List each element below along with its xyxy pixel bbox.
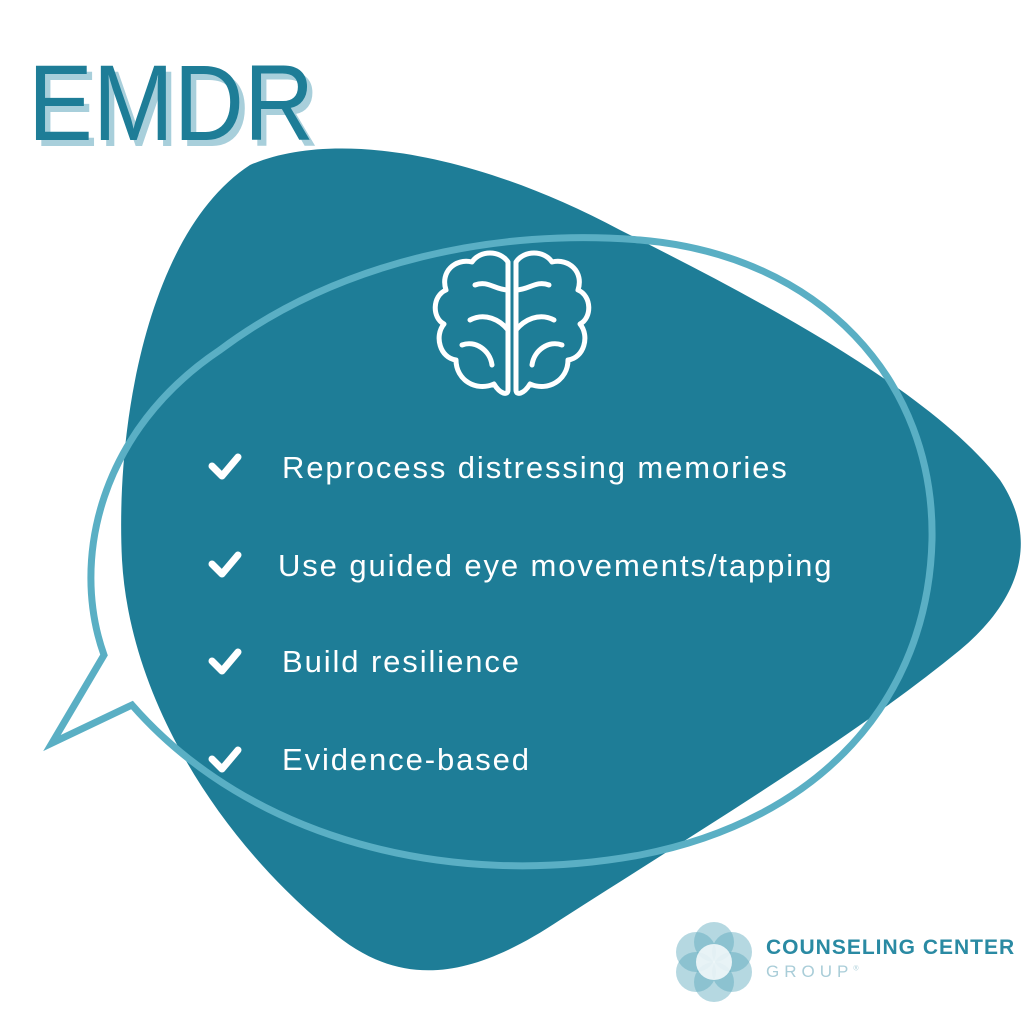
icon: logo flower xyxy=(676,922,752,1002)
logo: GROUP® xyxy=(766,962,864,981)
logo text: COUNSELING CENTER xyxy=(766,936,1015,959)
item 4: Evidence-based xyxy=(282,742,531,777)
item 2: Use guided eye movements/tapping xyxy=(278,548,833,583)
item 1: Reprocess distressing memories xyxy=(282,450,789,485)
title: EMDR xyxy=(28,42,314,163)
checkmarks xyxy=(212,457,238,769)
dark teal blob xyxy=(121,148,1021,970)
logo xyxy=(676,922,1015,1002)
item 3: Build resilience xyxy=(282,644,521,679)
icon: brain xyxy=(435,253,589,393)
speech bubble outline xyxy=(52,238,932,866)
